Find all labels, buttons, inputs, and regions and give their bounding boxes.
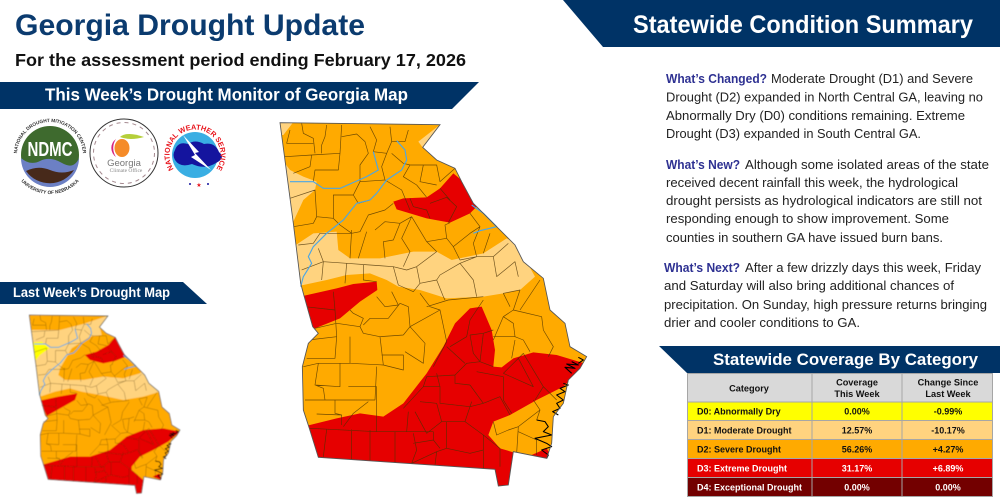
text block: what's next: and Saturday will also bring additional chances of [664, 278, 954, 293]
rivers [34, 324, 136, 396]
text block: what's changed: Abnormally Dry (D0) conditions remaining. Extreme [666, 108, 965, 123]
row: D3: +6.89% [933, 464, 963, 474]
row: D2 [687, 440, 993, 458]
row: D2: D2: Severe Drought [697, 444, 781, 454]
text block: what's new: received decent rainfall this week, the hydrological [666, 175, 958, 190]
banner: last week's map: Last Week’s Drought Map [13, 284, 170, 300]
logo: NDMC [14, 118, 86, 194]
text block: what's changed: Drought (D3) expanded in South Central GA. [666, 126, 921, 141]
county lines [285, 123, 557, 468]
row: D2: +4.27% [933, 444, 963, 454]
text block: what's new [666, 157, 989, 245]
banner: statewide coverage by category [659, 346, 1000, 373]
table header row: This Week [834, 389, 881, 399]
text block: what's new: Although some isolated areas of the state [745, 157, 989, 172]
row: D4: 0.00% [844, 482, 870, 492]
text block: what's new: drought persists as hydrological indicators are still not [666, 193, 982, 208]
logo: National Weather Service: ★ [196, 182, 202, 189]
rivers [290, 141, 497, 287]
text block: what's next: What’s Next? [664, 260, 740, 275]
row: D0 [687, 402, 993, 420]
text block: what's changed: What’s Changed? [666, 71, 767, 86]
D2 severe drought base [280, 123, 587, 486]
table header row: Category [729, 384, 770, 394]
subtitle: For the assessment period ending February 17, 2026 [15, 50, 466, 70]
text block: what's new: What’s New? [666, 157, 740, 172]
banner: statewide condition summary: Statewide Condition Summary [633, 11, 973, 39]
text block: what's next: precipitation. On Sunday, high pressure returns bringing [664, 297, 987, 312]
outline [29, 315, 180, 493]
title: Georgia Drought Update [15, 9, 365, 42]
banner: statewide condition summary [563, 0, 1000, 47]
logo: Georgia Climate Office: Climate Office [110, 167, 143, 174]
D3 extreme drought areas [300, 173, 590, 490]
logo: Georgia Climate Office [90, 119, 158, 187]
row: D1: D1: Moderate Drought [697, 426, 792, 436]
text block: what's changed [666, 71, 983, 141]
text block: what's changed: Drought (D2) expanded in North Central GA, leaving no [666, 90, 983, 104]
coast [155, 430, 178, 480]
D1 moderate drought areas [277, 120, 535, 298]
D1 areas [30, 315, 160, 400]
row: D1: -10.17% [931, 426, 965, 436]
D0 area [32, 342, 49, 360]
row: D0: D0: Abnormally Dry [697, 406, 781, 416]
logo: National Weather Service: NATIONAL WEATHER SERVICE [164, 124, 226, 172]
text block: what's new: counties in southern GA have issued burn bans. [666, 230, 943, 245]
banner: this week's map [0, 82, 479, 109]
table: coverage by category [687, 373, 993, 496]
logo: NDMC: NDMC [28, 139, 72, 161]
text block: what's new: responding enough to show improvement. Some [666, 211, 949, 226]
row: D1 [687, 420, 993, 440]
table header row: Change Since [918, 378, 978, 388]
table header row [687, 373, 993, 402]
county lines [32, 315, 165, 485]
text block: what's next [664, 260, 987, 330]
logo: Georgia Climate Office: Georgia [107, 158, 142, 169]
row: D4: D4: Exceptional Drought [697, 482, 802, 492]
row: D4: 0.00% [935, 482, 961, 492]
row: D3 [687, 458, 993, 478]
text block: what's changed: Moderate Drought (D1) and Severe [771, 71, 973, 86]
table header row: Last Week [925, 389, 972, 399]
row: D0: 0.00% [844, 406, 870, 416]
text block: what's next: drier and cooler conditions to GA. [664, 315, 860, 330]
row: D2: 56.26% [842, 444, 872, 454]
D2 base [29, 314, 180, 484]
map: last week's drought [28, 314, 181, 494]
state outline [280, 123, 587, 486]
coastal marshes [535, 357, 583, 458]
row: D1: 12.57% [842, 426, 872, 436]
banner: statewide coverage by category: Statewide Coverage By Category [713, 350, 979, 369]
row: D0: -0.99% [934, 406, 962, 416]
banner: last week's map [0, 282, 207, 304]
table header row: Coverage [836, 378, 878, 388]
banner: this week's map: This Week’s Drought Monitor of Georgia Map [45, 84, 408, 104]
logo: National Weather Service [164, 124, 226, 189]
row: D3: 31.17% [842, 464, 872, 474]
row: D4 [687, 478, 993, 496]
logo: NDMC: UNIVERSITY OF NEBRASKA [22, 179, 79, 194]
row: D3: D3: Extreme Drought [697, 464, 787, 474]
logo: NDMC: NATIONAL DROUGHT MITIGATION CENTER [14, 118, 86, 154]
text block: what's next: After a few drizzly days this week, Friday [745, 260, 981, 275]
map: this week's drought monitor of Georgia [277, 120, 590, 490]
D3 areas [40, 337, 180, 495]
